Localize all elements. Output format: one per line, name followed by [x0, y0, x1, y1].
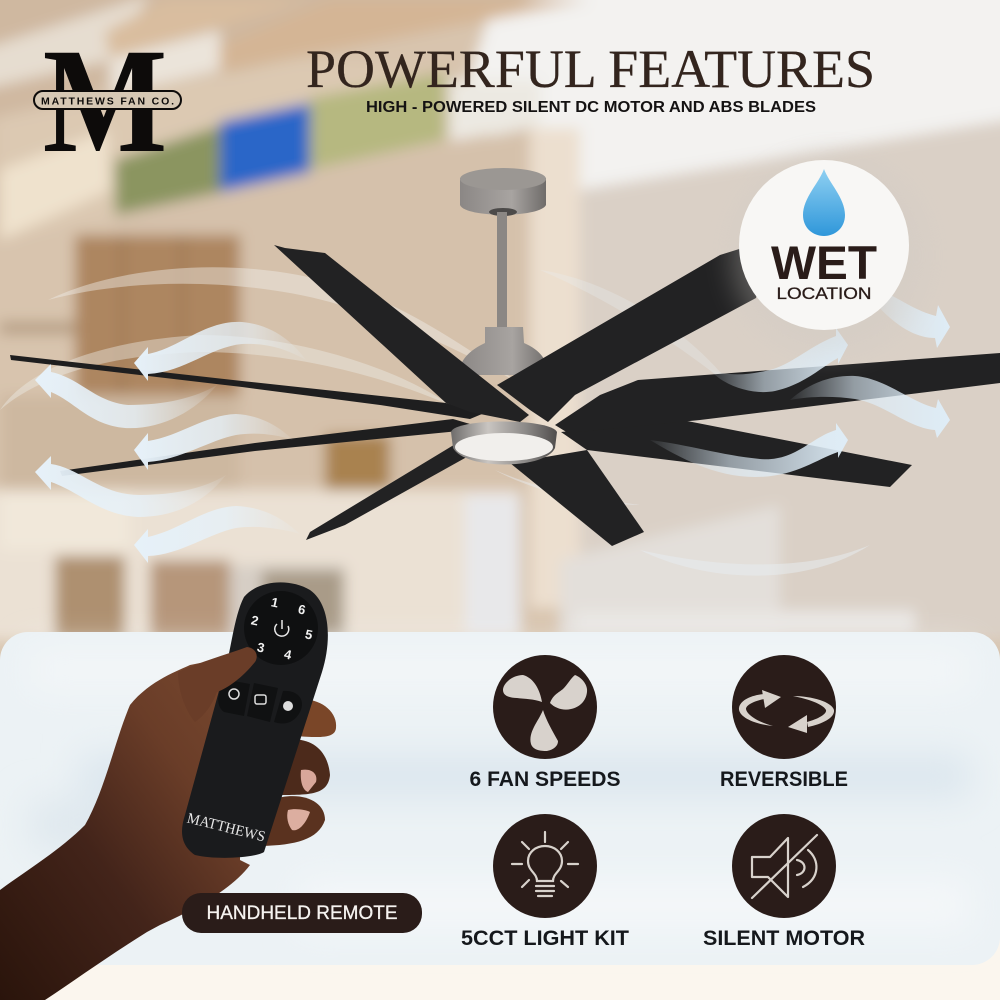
wet text: WET — [771, 236, 877, 289]
feature: light kit — [461, 814, 629, 950]
remote dial — [244, 591, 318, 665]
logo name plate — [34, 91, 181, 109]
remote numbers: 4 — [283, 646, 294, 663]
handheld remote label — [182, 893, 422, 933]
air flow swooshes behind the blades — [0, 267, 870, 576]
right arrows — [650, 286, 950, 477]
remote numbers: 1 — [270, 594, 280, 611]
label: SILENT MOTOR — [703, 926, 865, 950]
logo — [34, 17, 181, 184]
feature: silent motor — [703, 814, 865, 950]
remote numbers: 6 — [297, 601, 307, 618]
bottom strip — [0, 900, 1000, 1000]
label: REVERSIBLE — [720, 767, 848, 791]
thin left blades — [10, 355, 482, 476]
wet location badge — [732, 157, 928, 353]
hand back fingers — [262, 699, 336, 846]
location text: LOCATION — [776, 285, 872, 303]
light housing — [451, 422, 557, 464]
icon: rotation arrows — [739, 690, 834, 733]
hand holding remote — [0, 582, 336, 1000]
subtitle: HIGH - POWERED SILENT DC MOTOR AND ABS BLADES — [366, 99, 816, 116]
wide blades — [274, 245, 1000, 546]
remote numbers: 3 — [256, 639, 266, 656]
icon: water drop — [803, 169, 845, 236]
feature: 6 fan speeds — [470, 655, 620, 791]
label: 6 FAN SPEEDS — [470, 767, 620, 791]
icon: fan — [503, 675, 587, 751]
handheld remote label: HANDHELD REMOTE — [206, 903, 398, 924]
remote numbers: 5 — [304, 626, 314, 643]
remote body — [182, 582, 328, 858]
logo name: MATTHEWS FAN CO. — [41, 96, 174, 108]
ceiling fan — [10, 168, 1000, 546]
feature: reversible — [720, 655, 848, 791]
remote numbers: 2 — [250, 612, 260, 629]
thumb — [178, 647, 257, 722]
downrod — [497, 212, 507, 332]
hand and arm — [0, 655, 250, 1000]
remote buttons — [218, 680, 302, 724]
remote brand: MATTHEWS — [185, 811, 267, 845]
remote power icon — [275, 620, 289, 636]
left arrows — [35, 322, 306, 563]
air flow arrows — [35, 286, 950, 563]
logo letter M: M — [43, 17, 167, 184]
remote numbers — [250, 594, 314, 663]
label: 5CCT LIGHT KIT — [461, 926, 629, 950]
fan canopy — [460, 168, 546, 216]
motor housing — [459, 327, 548, 375]
features panel — [0, 632, 1000, 965]
icon: muted speaker — [752, 835, 817, 898]
title: POWERFUL FEATURES — [306, 39, 875, 99]
icon: light bulb — [512, 832, 578, 896]
